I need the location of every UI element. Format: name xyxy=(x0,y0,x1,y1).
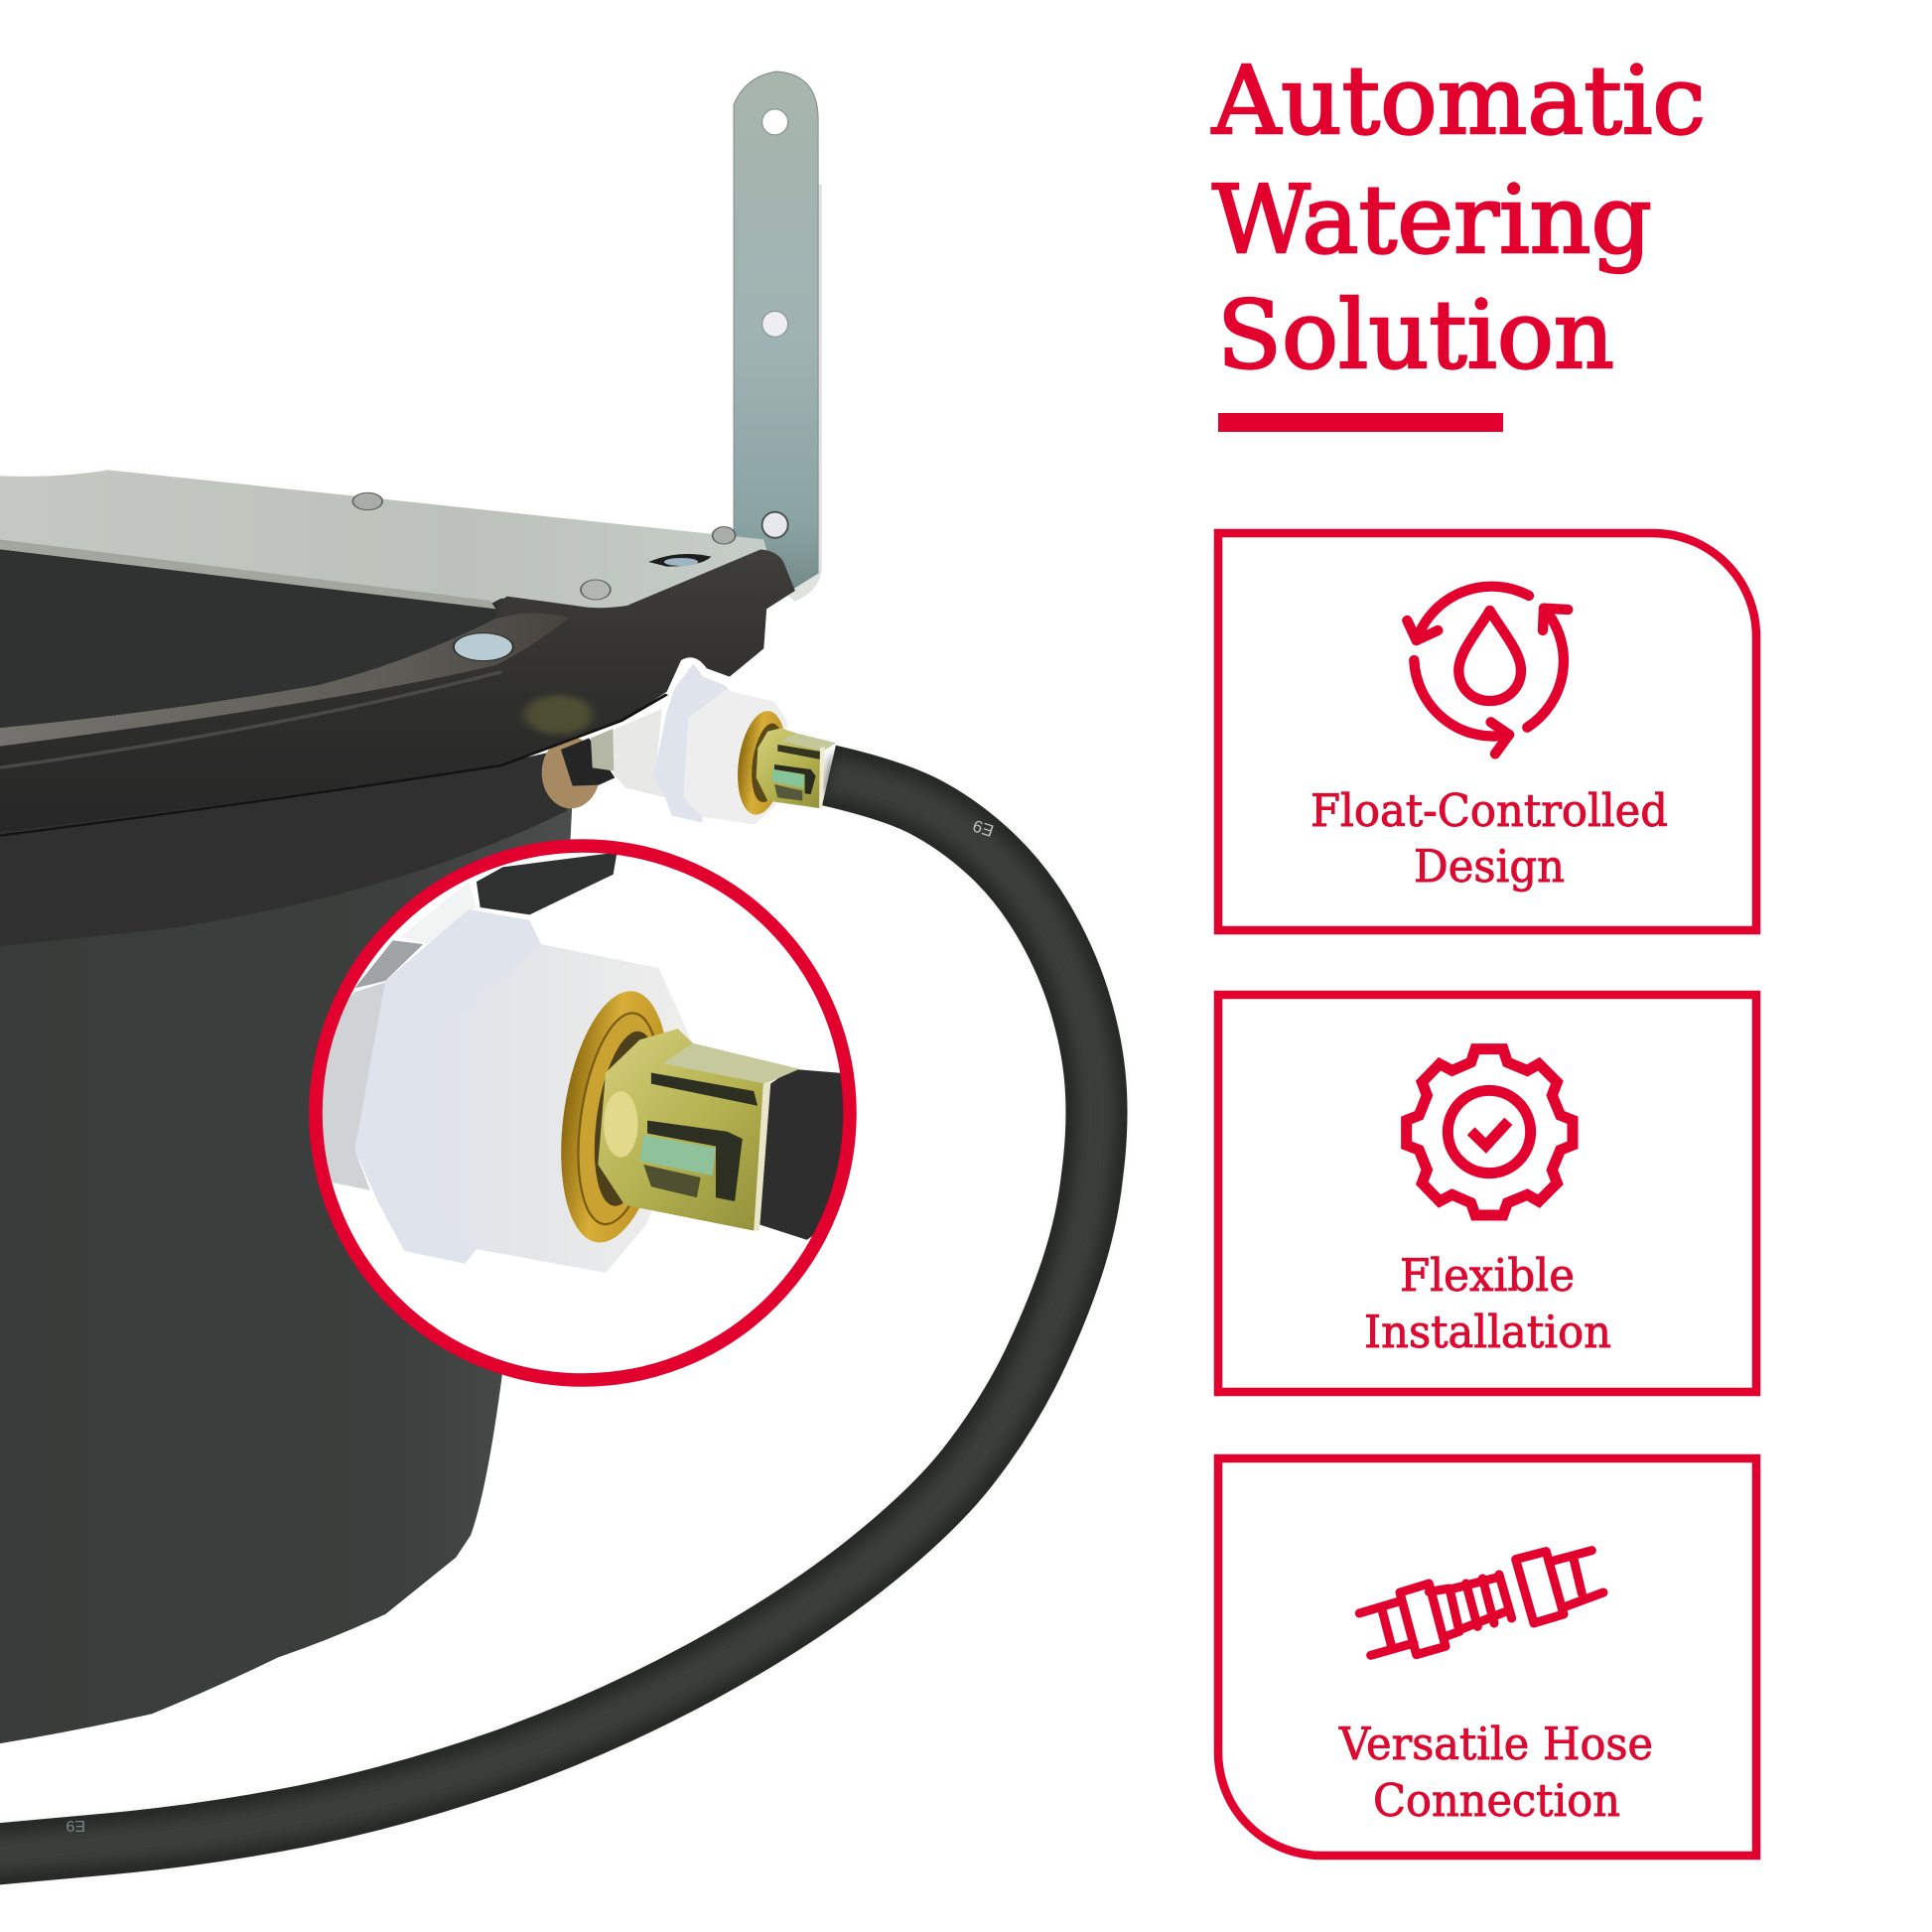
rim edge line xyxy=(0,694,667,836)
panel border xyxy=(1218,533,1756,930)
upper trough and rim xyxy=(0,470,795,836)
screw heads xyxy=(352,492,736,661)
title: Watering xyxy=(1212,166,1652,275)
hose inside lens xyxy=(759,1069,844,1240)
ferrule crimps xyxy=(771,733,836,808)
brass ring xyxy=(561,991,664,1243)
title underline xyxy=(1218,413,1503,432)
hose marking upper: E9 xyxy=(971,816,996,840)
nut cylinder xyxy=(480,944,691,1273)
title xyxy=(1211,47,1706,390)
ferrule crimps xyxy=(604,1043,799,1231)
label: Installation xyxy=(1364,1308,1611,1358)
panel: versatile hose connection xyxy=(1218,1458,1756,1856)
pale tube behind nut xyxy=(322,982,385,1190)
dark ring shadow xyxy=(594,1031,648,1206)
olive reflection on rim xyxy=(524,695,593,735)
hex nut xyxy=(354,909,541,1264)
icon: water cycle xyxy=(1407,587,1568,754)
panel: flexible installation xyxy=(1218,995,1756,1392)
product photo: trough with hose xyxy=(0,71,1096,1856)
ferrule face xyxy=(598,1029,799,1231)
brass ring inner groove xyxy=(748,722,788,804)
plate front lip xyxy=(0,539,495,609)
white reflection on nut xyxy=(400,882,477,944)
wall bracket xyxy=(734,71,822,604)
dark trough tab xyxy=(477,852,617,914)
ferrule xyxy=(757,728,836,808)
panel border xyxy=(1218,1458,1756,1856)
dark trough interior xyxy=(0,543,510,728)
icon: hose coupling xyxy=(1359,1551,1603,1655)
brass ring xyxy=(732,708,792,818)
label xyxy=(1338,1720,1653,1827)
hex nut xyxy=(653,663,732,822)
nut cylinder xyxy=(683,690,787,825)
inlet valve fitting xyxy=(542,663,836,825)
brown washer xyxy=(542,737,600,808)
grey sliver xyxy=(354,940,423,988)
white tube xyxy=(613,709,665,797)
rubber hose xyxy=(0,775,1096,1856)
panel: float-controlled design xyxy=(1218,533,1756,930)
hose marking lower: E9 xyxy=(66,1817,85,1834)
rim top surface xyxy=(0,613,570,747)
zoom lens: connector close-up xyxy=(298,845,860,1381)
rubber washer xyxy=(561,738,615,786)
brass ring groove xyxy=(577,1012,654,1225)
galvanised lid plate xyxy=(0,470,766,608)
label: Flexible xyxy=(1400,1251,1575,1302)
panel border xyxy=(1218,995,1756,1392)
lens ring xyxy=(316,846,850,1380)
rim lower highlight xyxy=(0,672,501,767)
title: Automatic xyxy=(1211,47,1706,156)
title: Solution xyxy=(1217,281,1614,390)
label xyxy=(1364,1251,1611,1358)
trough body xyxy=(0,788,573,1743)
lower rim band xyxy=(0,748,570,946)
stem xyxy=(591,729,615,771)
moulded rim xyxy=(0,549,795,832)
label: Connection xyxy=(1373,1776,1620,1827)
label xyxy=(1311,786,1668,893)
label: Versatile Hose xyxy=(1338,1720,1653,1770)
icon: gear with check xyxy=(1407,1049,1573,1215)
label: Float-Controlled xyxy=(1311,786,1668,837)
label: Design xyxy=(1414,842,1565,893)
